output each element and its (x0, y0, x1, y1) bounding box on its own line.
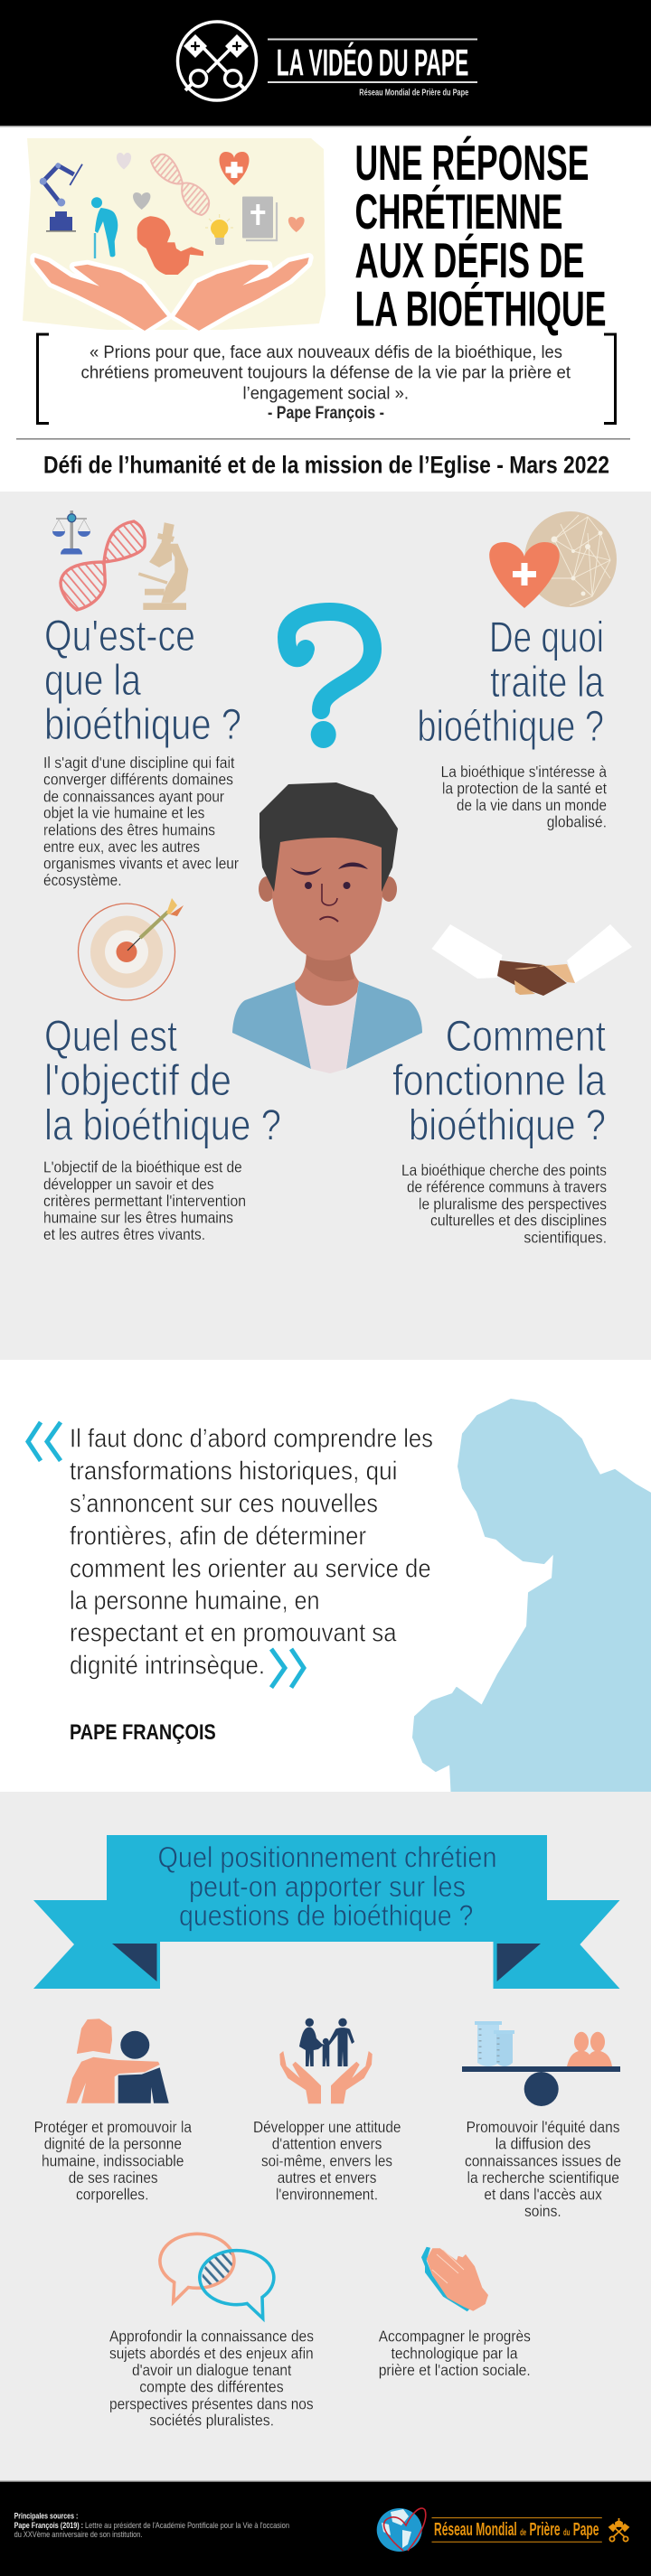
sources (14, 2512, 289, 2539)
heading: what is bioethics: Qu'est-ce (44, 612, 195, 660)
heading: how it works (392, 1012, 606, 1150)
text: protect dignity: de ses racines (69, 2169, 157, 2187)
text: what does it cover: La bioéthique s'intéresse à (441, 763, 607, 781)
icon: microscope (138, 522, 188, 610)
ribbon banner (33, 1835, 620, 1989)
icon: robot arm (40, 163, 82, 232)
quote text (70, 1425, 433, 1681)
text: protect dignity (34, 2118, 192, 2203)
quote text: frontières, afin de déterminer (70, 1522, 366, 1550)
icon: two people embracing (66, 2019, 169, 2103)
icon: caring hands (34, 258, 309, 331)
text: deepen knowledge: perspectives présentes dans nos (109, 2394, 314, 2412)
sources: Principales sources : (14, 2512, 78, 2521)
text: what is bioethics: de connaissances ayant pour (43, 787, 224, 805)
heading: how it works: bioéthique ? (409, 1101, 606, 1150)
sources: du XXVème anniversaire de son institution. (14, 2530, 142, 2539)
icon: light bulb (205, 214, 233, 245)
heading: how it works: Comment (446, 1012, 606, 1061)
prayer intention quote: chrétiens promeuvent toujours la défense de la vie par la prière et (81, 363, 571, 382)
text: promote equity: Promouvoir l'équité dans (467, 2118, 620, 2136)
text: objective: critères permettant l'intervention (43, 1192, 246, 1210)
text: what is bioethics: organismes vivants et avec leur (43, 855, 239, 873)
quote text: transformations historiques, qui (70, 1457, 397, 1486)
icon: handshake (432, 924, 632, 996)
icon: closing chevrons (271, 1649, 304, 1688)
text: what is bioethics: relations des êtres humains (43, 820, 215, 838)
panel: four questions (0, 492, 651, 1360)
heading: objective (44, 1012, 281, 1150)
text: objective: L'objectif de la bioéthique est de (43, 1158, 242, 1176)
quote text: respectant et en promouvant sa (70, 1619, 397, 1648)
text: accompany progress: Accompagner le progrès (379, 2328, 531, 2346)
text: what does it cover: globalisé. (547, 813, 607, 831)
text: promote equity: soins. (524, 2202, 561, 2220)
text: deepen knowledge: d'avoir un dialogue tenant (132, 2361, 291, 2379)
heading: what does it cover: traite la (490, 658, 604, 707)
text: attitude of care (253, 2118, 401, 2203)
title (354, 135, 606, 336)
text: what does it cover (441, 763, 607, 831)
text: how it works: le pluralisme des perspectives (419, 1194, 607, 1213)
footer band (0, 2481, 651, 2576)
icon: hearts (117, 152, 305, 232)
text: objective (43, 1158, 246, 1243)
logo wordmark: Réseau Mondial de Prière du Pape (359, 88, 468, 98)
icon: dna strand (151, 155, 209, 215)
icon: fetus (137, 216, 203, 275)
icon: family in hands (279, 2019, 373, 2103)
prayer intention quote: - Pape François - (268, 404, 384, 423)
panel: pope quote (0, 1360, 651, 1792)
logo wordmark: LA VIDÉO DU PAPE (277, 41, 468, 83)
text: attitude of care: Développer une attitude (253, 2118, 401, 2136)
heading: what does it cover: De quoi (489, 614, 604, 662)
heading: how it works: fonctionne la (392, 1056, 606, 1105)
icon: papal keys (609, 2518, 628, 2542)
icon: globe and heart (377, 2508, 426, 2552)
text: attitude of care: l'environnement. (276, 2185, 378, 2203)
text: how it works (401, 1161, 607, 1246)
text: what is bioethics: objet la vie humaine et les (43, 804, 204, 822)
heading: what does it cover: bioéthique ? (417, 702, 604, 751)
icon: heart and neural sphere (489, 511, 617, 608)
sources: Lettre au président de l'Académie Pontificale pour la Vie à l'occasion (85, 2521, 289, 2530)
quote attribution: PAPE FRANÇOIS (70, 1721, 216, 1745)
logo wordmark (268, 38, 477, 98)
text: how it works: culturelles et des disciplines (430, 1212, 607, 1230)
text: what is bioethics (43, 754, 239, 889)
text: what is bioethics: écosystème. (43, 871, 121, 889)
text: attitude of care: d'attention envers (272, 2135, 382, 2153)
illustration: hero bioethics (23, 138, 326, 331)
text: deepen knowledge: sujets abordés et des enjeux afin (109, 2344, 314, 2362)
text: objective: et les autres êtres vivants. (43, 1225, 205, 1243)
heading: what is bioethics (44, 612, 241, 749)
ribbon banner: questions de bioéthique ? (179, 1899, 473, 1932)
icon: scales (52, 511, 90, 555)
heading: objective: la bioéthique ? (44, 1101, 281, 1150)
heading: objective: Quel est (44, 1012, 177, 1061)
illustration: thoughtful man (232, 782, 422, 1073)
text: what does it cover: de la vie dans un monde (457, 796, 607, 814)
quote text: comment les orienter au service de (70, 1554, 431, 1583)
text: attitude of care: soi-même, envers les (261, 2151, 392, 2169)
text: accompany progress (379, 2328, 531, 2379)
text: what is bioethics: converger différents domaines (43, 771, 233, 789)
quote text: dignité intrinsèque. (70, 1652, 265, 1681)
icon: opening chevrons (28, 1422, 61, 1461)
text: objective: développer un savoir et des (43, 1175, 213, 1193)
ribbon banner: Quel positionnement chrétien (157, 1841, 497, 1874)
text: promote equity: et dans l'accès aux (484, 2185, 602, 2203)
text: promote equity: la recherche scientifique (467, 2169, 619, 2187)
quote text: la personne humaine, en (70, 1587, 320, 1616)
icon: overlapping speech bubbles (160, 2234, 274, 2318)
icon: target and dart (78, 898, 184, 1000)
sources: Pape François (2019) : (14, 2521, 83, 2530)
logo: worldwide prayer network: Réseau Mondial de Prière du Pape (434, 2520, 599, 2540)
heading: what does it cover (417, 614, 604, 751)
text: deepen knowledge (109, 2328, 314, 2430)
icon: praying hands (421, 2247, 488, 2311)
text: promote equity: la diffusion des (495, 2135, 590, 2153)
silhouette: praying pope (413, 1400, 651, 1792)
quote text: Il faut donc d’abord comprendre les (70, 1425, 433, 1454)
text: protect dignity: corporelles. (76, 2185, 148, 2203)
icon: crossed keys logo (177, 22, 257, 100)
icon: lab scale of equity (462, 2021, 620, 2106)
text: accompany progress: prière et l'action sociale. (379, 2361, 531, 2379)
text: promote equity: connaissances issues de (465, 2151, 621, 2169)
header band (0, 0, 651, 126)
quote text: s’annoncent sur ces nouvelles (70, 1489, 378, 1518)
heading: what is bioethics: que la (44, 656, 141, 705)
icon: bible (242, 197, 277, 240)
text: how it works: La bioéthique cherche des points (401, 1161, 607, 1179)
text: deepen knowledge: Approfondir la connaissance des (109, 2328, 314, 2346)
panel: christian position (0, 1792, 651, 2482)
text: what is bioethics: entre eux, avec les autres (43, 838, 200, 856)
text: what is bioethics: Il s'agit d'une discipline qui fait (43, 754, 235, 772)
text: accompany progress: technologique par la (391, 2344, 518, 2362)
icon: question mark (287, 612, 373, 748)
text: protect dignity: dignité de la personne (44, 2135, 182, 2153)
text: protect dignity: humaine, indissociable (42, 2151, 184, 2169)
text: deepen knowledge: sociétés pluralistes. (149, 2412, 274, 2430)
text: protect dignity: Protéger et promouvoir la (34, 2118, 192, 2136)
icon: elderly person (91, 197, 118, 258)
text: deepen knowledge: compte des différentes (139, 2378, 284, 2396)
icon: dna (61, 521, 145, 610)
text: attitude of care: autres et envers (278, 2169, 376, 2187)
prayer intention quote (38, 334, 615, 423)
text: objective: humaine sur les êtres humains (43, 1208, 233, 1226)
text: how it works: de référence communs à travers (407, 1178, 607, 1196)
text: how it works: scientifiques. (524, 1228, 607, 1246)
text: promote equity (465, 2118, 621, 2220)
prayer intention quote: « Prions pour que, face aux nouveaux défis de la bioéthique, les (90, 343, 562, 362)
ribbon banner: peut-on apporter sur les (189, 1870, 466, 1903)
text: what does it cover: la protection de la santé et (442, 779, 607, 797)
prayer intention quote: l’engagement social ». (242, 385, 409, 403)
heading: what is bioethics: bioéthique ? (44, 700, 241, 749)
heading: objective: l'objectif de (44, 1056, 231, 1105)
